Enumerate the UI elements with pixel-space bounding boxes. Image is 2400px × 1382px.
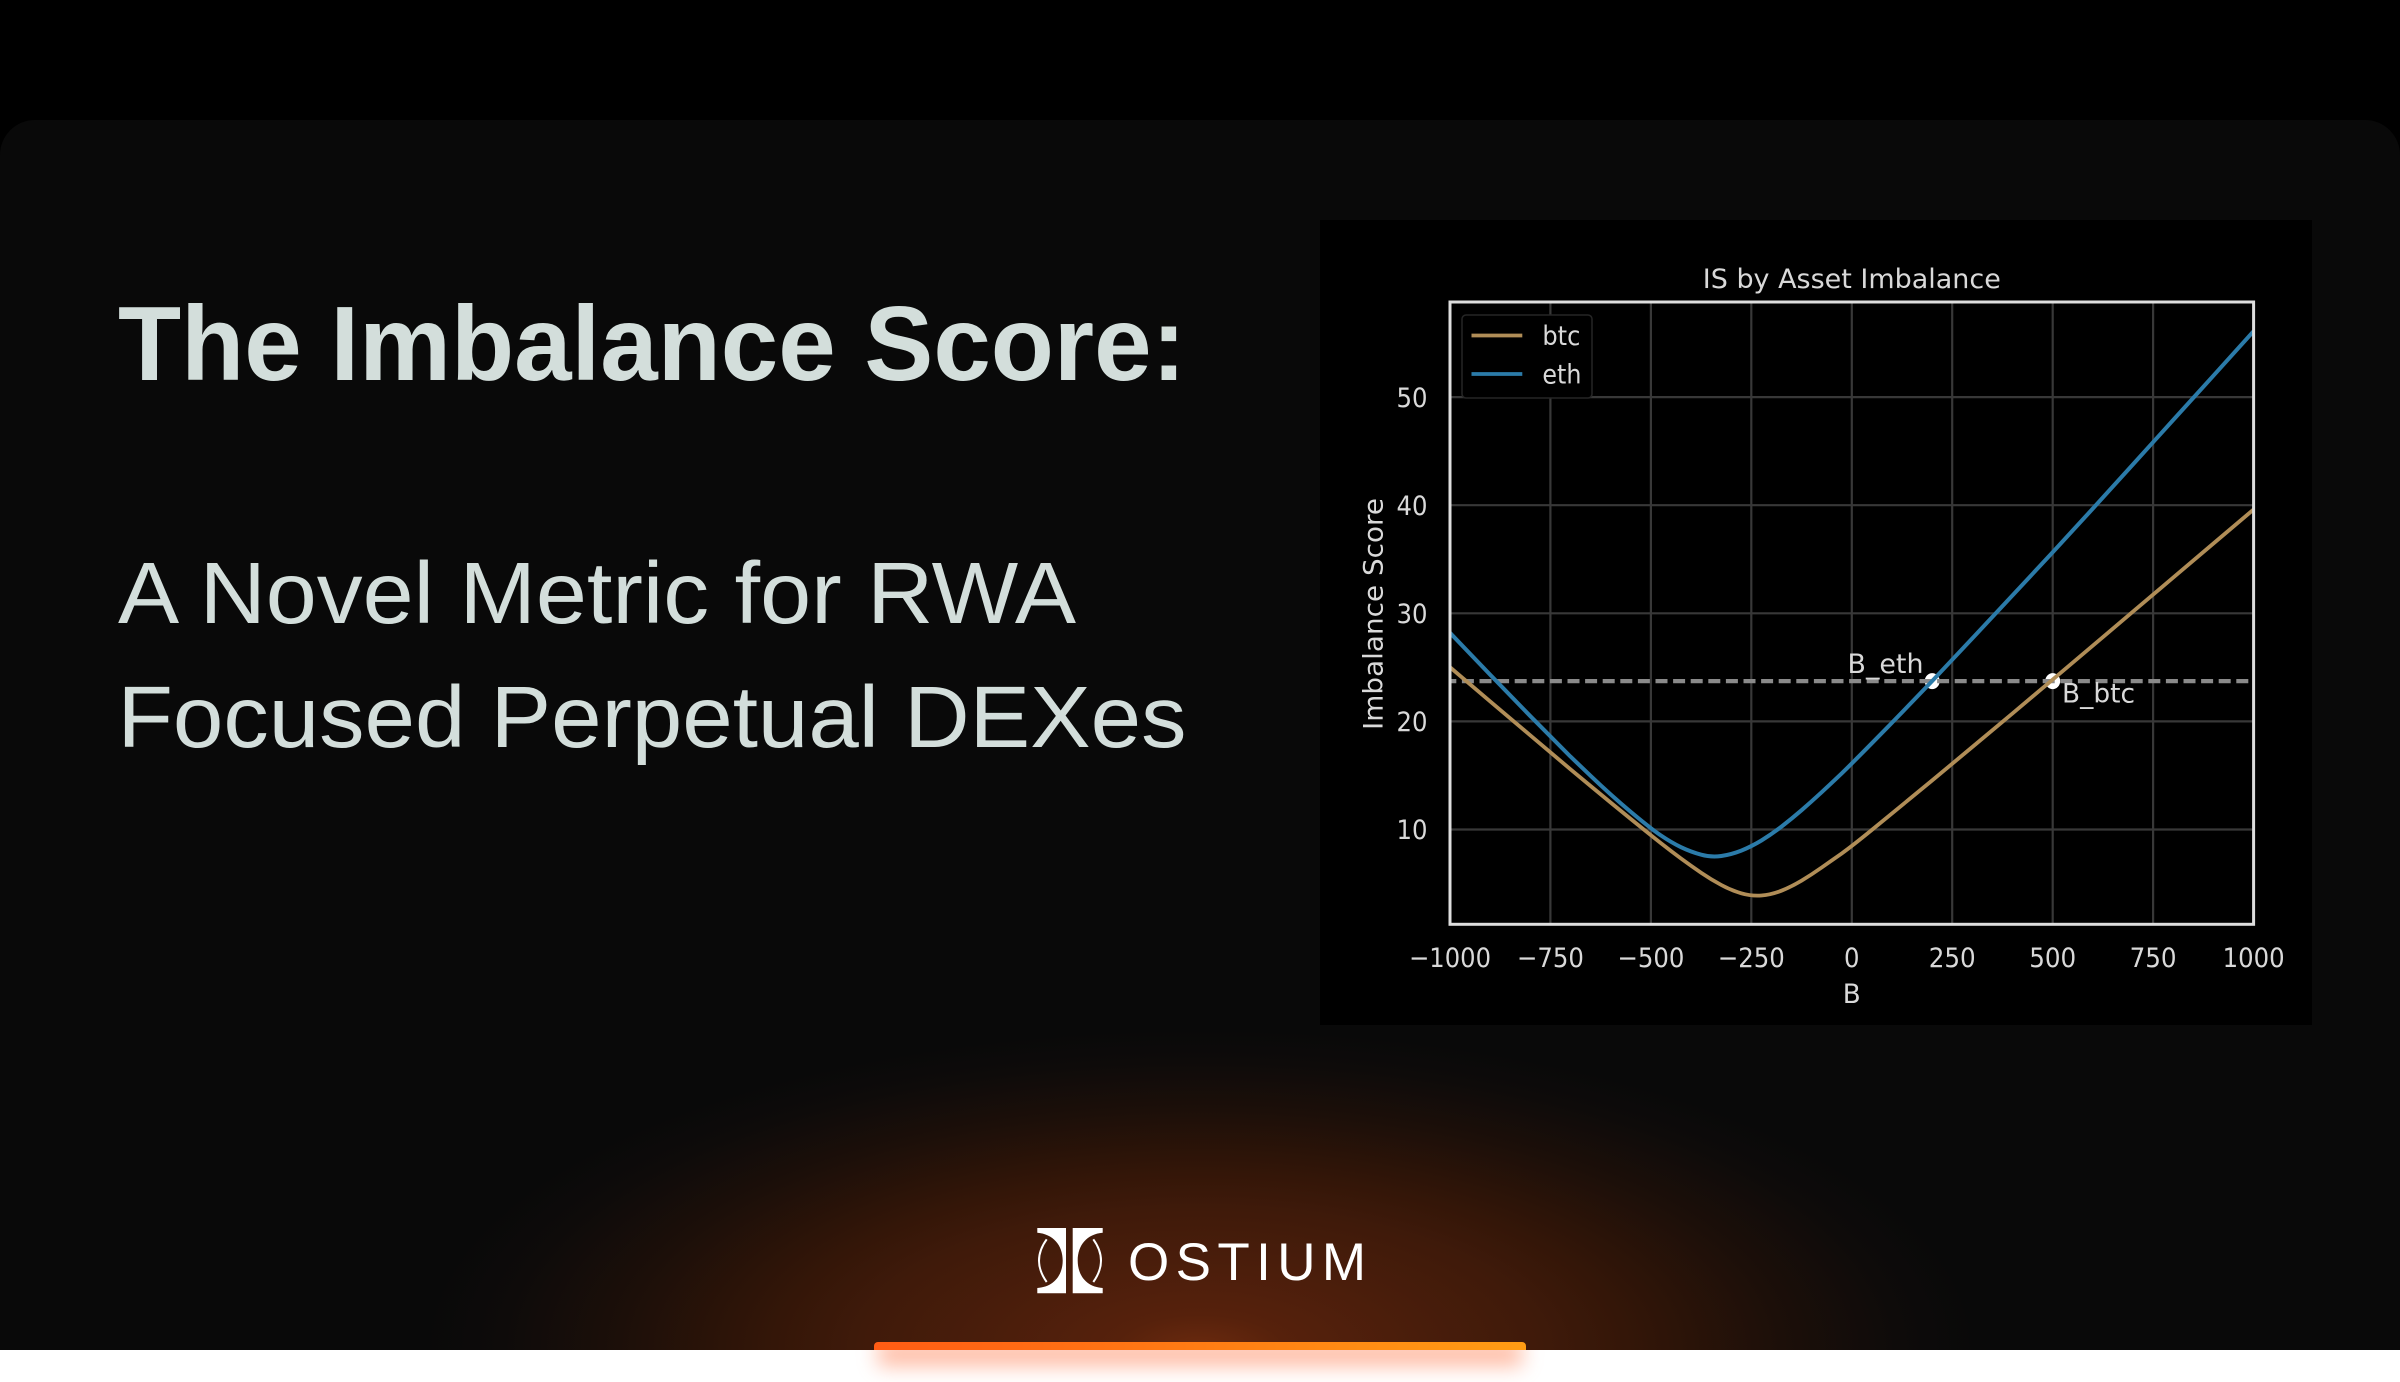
x tick labels: 0 xyxy=(1844,943,1860,974)
x tick labels: −1000 xyxy=(1409,943,1491,974)
y tick labels: 30 xyxy=(1396,599,1428,630)
annotation B_btc: B_btc xyxy=(2062,679,2135,710)
legend label btc: btc xyxy=(1542,321,1580,352)
logo: Ostium xyxy=(1037,1228,1366,1293)
x tick labels: −250 xyxy=(1718,943,1785,974)
annotation B_eth: B_eth xyxy=(1848,649,1924,680)
intersection markers xyxy=(1925,673,2060,689)
chart background xyxy=(1320,220,2312,1025)
y tick labels: 40 xyxy=(1396,491,1428,522)
orange glow xyxy=(425,1030,1975,1350)
threshold dashed line xyxy=(1450,679,2254,683)
bar shadow xyxy=(878,1342,1522,1366)
x axis label: B xyxy=(1843,979,1861,1010)
x tick labels xyxy=(1409,943,2285,974)
subtitle line 1: A Novel Metric for RWA xyxy=(118,545,1076,642)
legend swatch btc xyxy=(1472,334,1522,337)
y tick labels: 20 xyxy=(1396,707,1428,738)
wordmark: OSTIUM xyxy=(1128,1233,1366,1292)
y tick labels: 50 xyxy=(1396,383,1428,414)
y tick labels xyxy=(1396,383,1428,846)
legend xyxy=(1462,315,1592,398)
x tick labels: 250 xyxy=(1929,943,1976,974)
plot border xyxy=(1450,302,2254,924)
white bottom strip xyxy=(0,1350,2400,1382)
x tick labels: 750 xyxy=(2130,943,2177,974)
grid lines xyxy=(1450,302,2254,924)
y tick labels: 10 xyxy=(1396,815,1428,846)
x tick labels: 1000 xyxy=(2223,943,2285,974)
subtitle line 2: Focused Perpetual DEXes xyxy=(118,669,1186,766)
x tick labels: 500 xyxy=(2029,943,2076,974)
legend box xyxy=(1462,315,1592,398)
legend label eth: eth xyxy=(1542,360,1581,390)
eth curve xyxy=(1450,331,2254,857)
icon: Ostium mark xyxy=(1037,1228,1103,1293)
orange accent bar xyxy=(874,1342,1526,1350)
subtitle xyxy=(118,545,1186,766)
legend swatch eth xyxy=(1472,372,1522,376)
chart title: IS by Asset Imbalance xyxy=(1703,264,2001,295)
title: The Imbalance Score: xyxy=(118,285,1186,403)
chart: IS by Asset Imbalance xyxy=(1320,220,2312,1025)
btc curve xyxy=(1450,510,2254,896)
x tick labels: −750 xyxy=(1517,943,1584,974)
y axis label: Imbalance Score xyxy=(1358,498,1390,730)
x tick labels: −500 xyxy=(1617,943,1684,974)
